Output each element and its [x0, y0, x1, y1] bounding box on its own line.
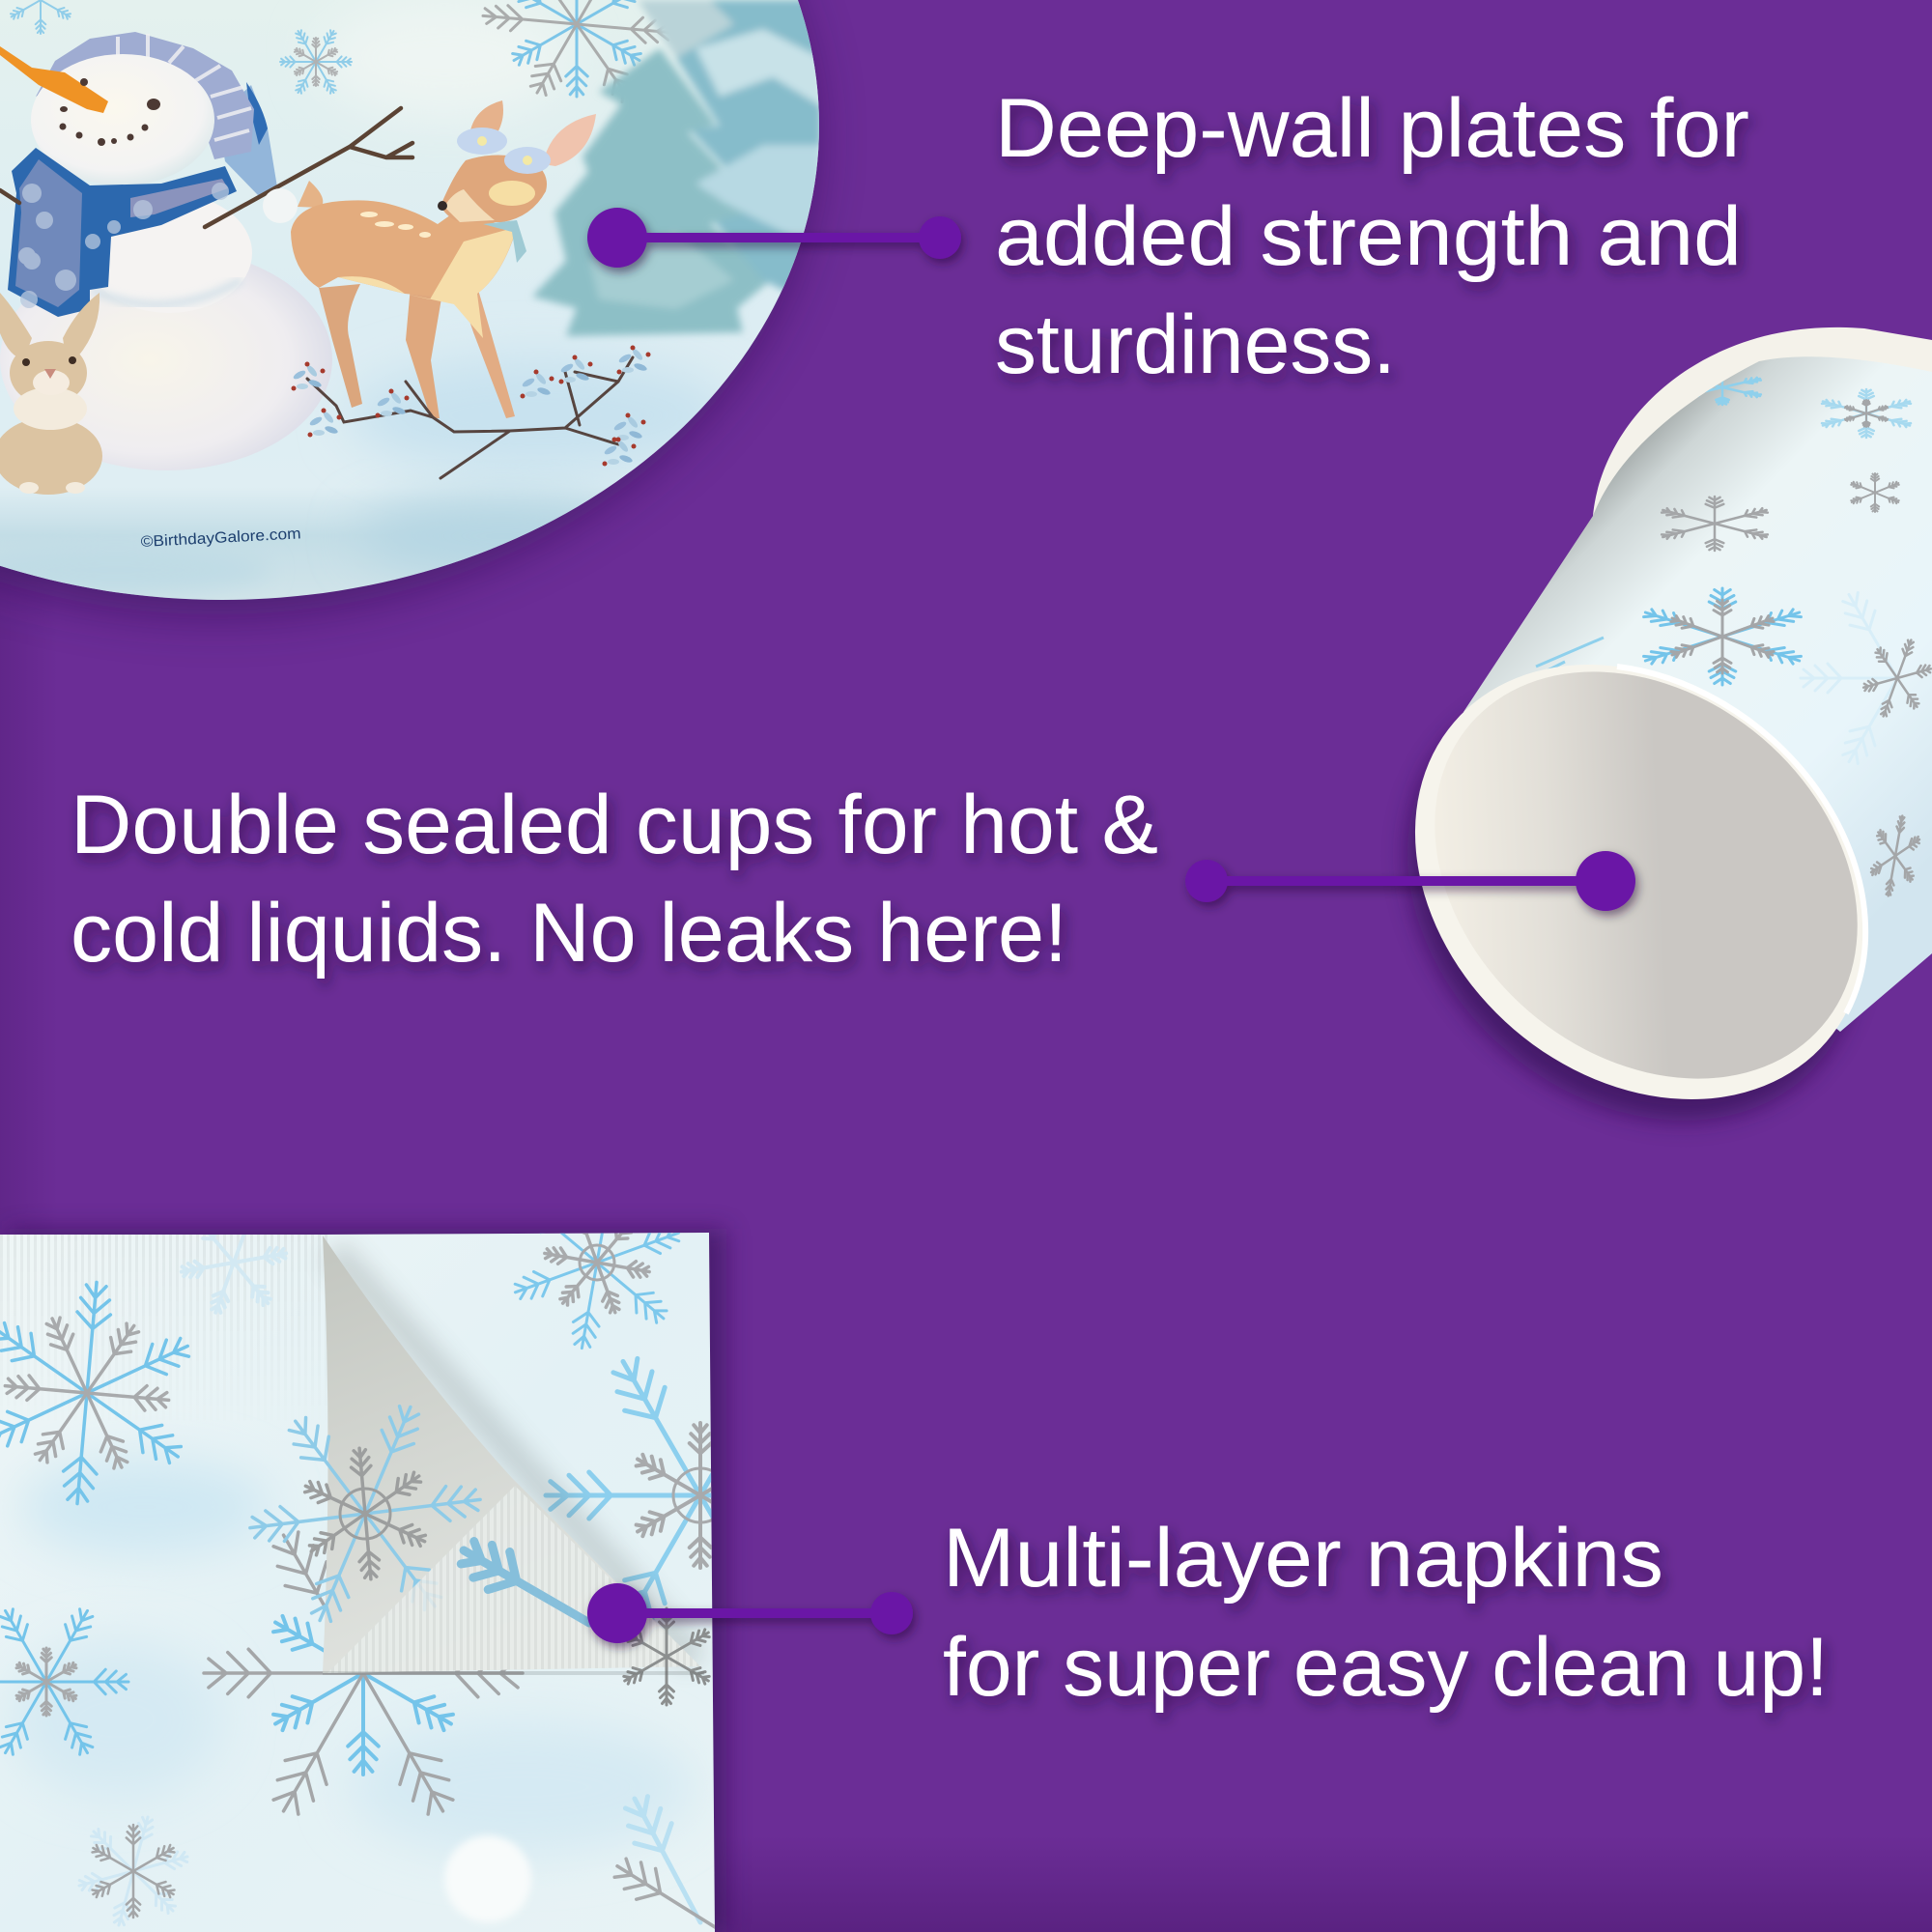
- text block: cups: [71, 779, 1158, 980]
- text block: cups: cold liquids. No leaks here!: [71, 887, 1067, 980]
- callout: cup: [1185, 851, 1635, 911]
- callout: napkin: [587, 1583, 913, 1643]
- hat: [36, 32, 278, 195]
- cup body: [1463, 356, 1932, 1032]
- text block: napkins: for super easy clean up!: [943, 1621, 1829, 1714]
- icon: snowflakes on napkin: [0, 1233, 715, 1929]
- cup base: [1327, 575, 1932, 1189]
- branch with berries: [292, 346, 651, 478]
- scarf: [8, 148, 237, 317]
- text block: plates: sturdiness.: [995, 298, 1396, 391]
- panel: napkin: [0, 1220, 735, 1932]
- snowman: [0, 32, 412, 470]
- copyright text: ©BirthdayGalore.com: [140, 526, 301, 551]
- cup rim: [1593, 327, 1932, 516]
- icon: snowflakes on plate: [9, 0, 696, 139]
- callout: plate: [587, 208, 961, 268]
- stick arm: [0, 108, 412, 227]
- folded corner: [219, 1236, 712, 1705]
- text block: napkins: Multi-layer napkins: [943, 1512, 1663, 1605]
- text block: plates: [995, 82, 1749, 391]
- fold shadow: [333, 1251, 696, 1662]
- text block: cups: Double sealed cups for hot &: [71, 779, 1158, 871]
- bunny: [0, 293, 102, 495]
- deer: [291, 100, 596, 418]
- panel: paper cup: [1398, 327, 1932, 1130]
- text block: plates: Deep-wall plates for: [995, 82, 1749, 175]
- trees: [532, 0, 821, 336]
- text block: plates: added strength and: [995, 190, 1742, 283]
- panel: paper plate: [0, 0, 831, 614]
- eyes and mouth: [60, 78, 160, 146]
- carrot: [0, 46, 108, 113]
- text block: napkins: [943, 1512, 1829, 1714]
